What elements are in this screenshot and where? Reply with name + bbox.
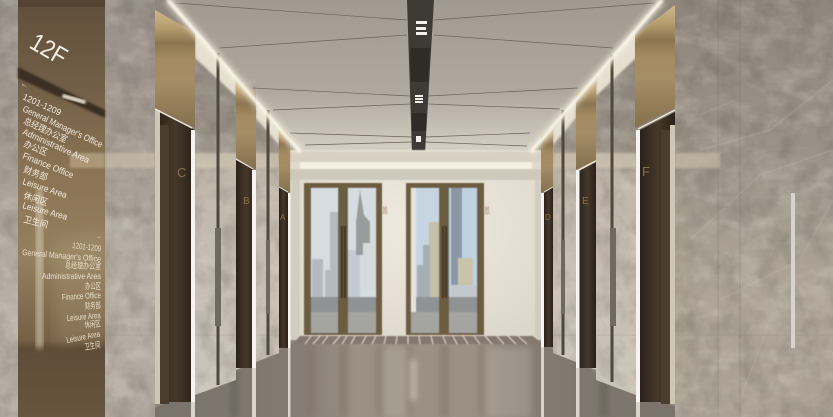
- left directory list: 休闲区: [22, 189, 50, 208]
- right directory list: 1201-1209: [72, 240, 102, 254]
- floor: [155, 340, 678, 417]
- left directory list: Administrative Area: [21, 127, 91, 165]
- elevator D: D: [545, 213, 551, 222]
- right directory list: Finance Office: [62, 290, 101, 302]
- right directory list: General Manager's Office: [22, 247, 102, 264]
- left directory list: 财务部: [22, 164, 50, 182]
- left directory list: 1201-1209: [21, 92, 63, 118]
- glass door left, room 302: [304, 183, 387, 335]
- ceiling: [165, 0, 665, 153]
- elevator A: [279, 125, 290, 417]
- glass directory sign: [18, 0, 105, 417]
- elevator A: A: [280, 213, 286, 222]
- left directory list: ←: [19, 79, 30, 90]
- door control strips: [215, 53, 616, 385]
- striped floor mat: [293, 336, 542, 344]
- left directory list: 办公区: [22, 138, 50, 158]
- elevator F: F: [642, 164, 650, 179]
- wall light strip: [791, 193, 795, 348]
- right directory list: Administrative Area: [42, 271, 101, 281]
- left directory list: 总经理办公室: [22, 115, 69, 145]
- glass door right, room 303: 303: [483, 206, 489, 215]
- right directory list: →: [96, 234, 102, 240]
- left directory list: Leisure Area: [21, 176, 68, 200]
- elevator B: B: [243, 196, 250, 207]
- left directory list: 卫生间: [23, 213, 49, 230]
- right directory list: 办公区: [85, 281, 101, 291]
- right directory list: [22, 234, 102, 352]
- left directory list: [19, 79, 104, 230]
- elevator F: [635, 5, 675, 417]
- ceiling cove lights: [168, 0, 662, 152]
- elevator B: [236, 78, 256, 417]
- cream wall tops under cove light: [195, 30, 636, 145]
- glass door left, room 302: 302: [381, 206, 387, 215]
- ceiling light strip: [407, 0, 434, 153]
- right directory list: 财务部: [85, 300, 101, 311]
- right directory list: Leisure Area: [65, 329, 101, 345]
- right directory list: 休闲区: [84, 318, 101, 330]
- elevator E: [576, 78, 596, 417]
- elevator C: C: [177, 165, 186, 180]
- left directory list: Leisure Area: [21, 200, 69, 222]
- left directory list: Finance Office: [21, 151, 75, 180]
- right directory list: 卫生间: [84, 340, 101, 352]
- elevator C: [155, 10, 195, 417]
- left directory list: General Manager's Office: [21, 104, 104, 150]
- glass door right, room 303: [406, 183, 489, 335]
- reflected light band: [105, 153, 720, 168]
- elevator D: [541, 125, 553, 417]
- floor number 12F: 12F: [25, 28, 72, 71]
- right directory list: 总经理办公室: [65, 260, 102, 271]
- floor-level panel seam: [105, 334, 833, 336]
- back wall: [290, 150, 542, 340]
- right directory list: Leisure Area: [66, 310, 101, 323]
- elevator E: E: [582, 196, 589, 207]
